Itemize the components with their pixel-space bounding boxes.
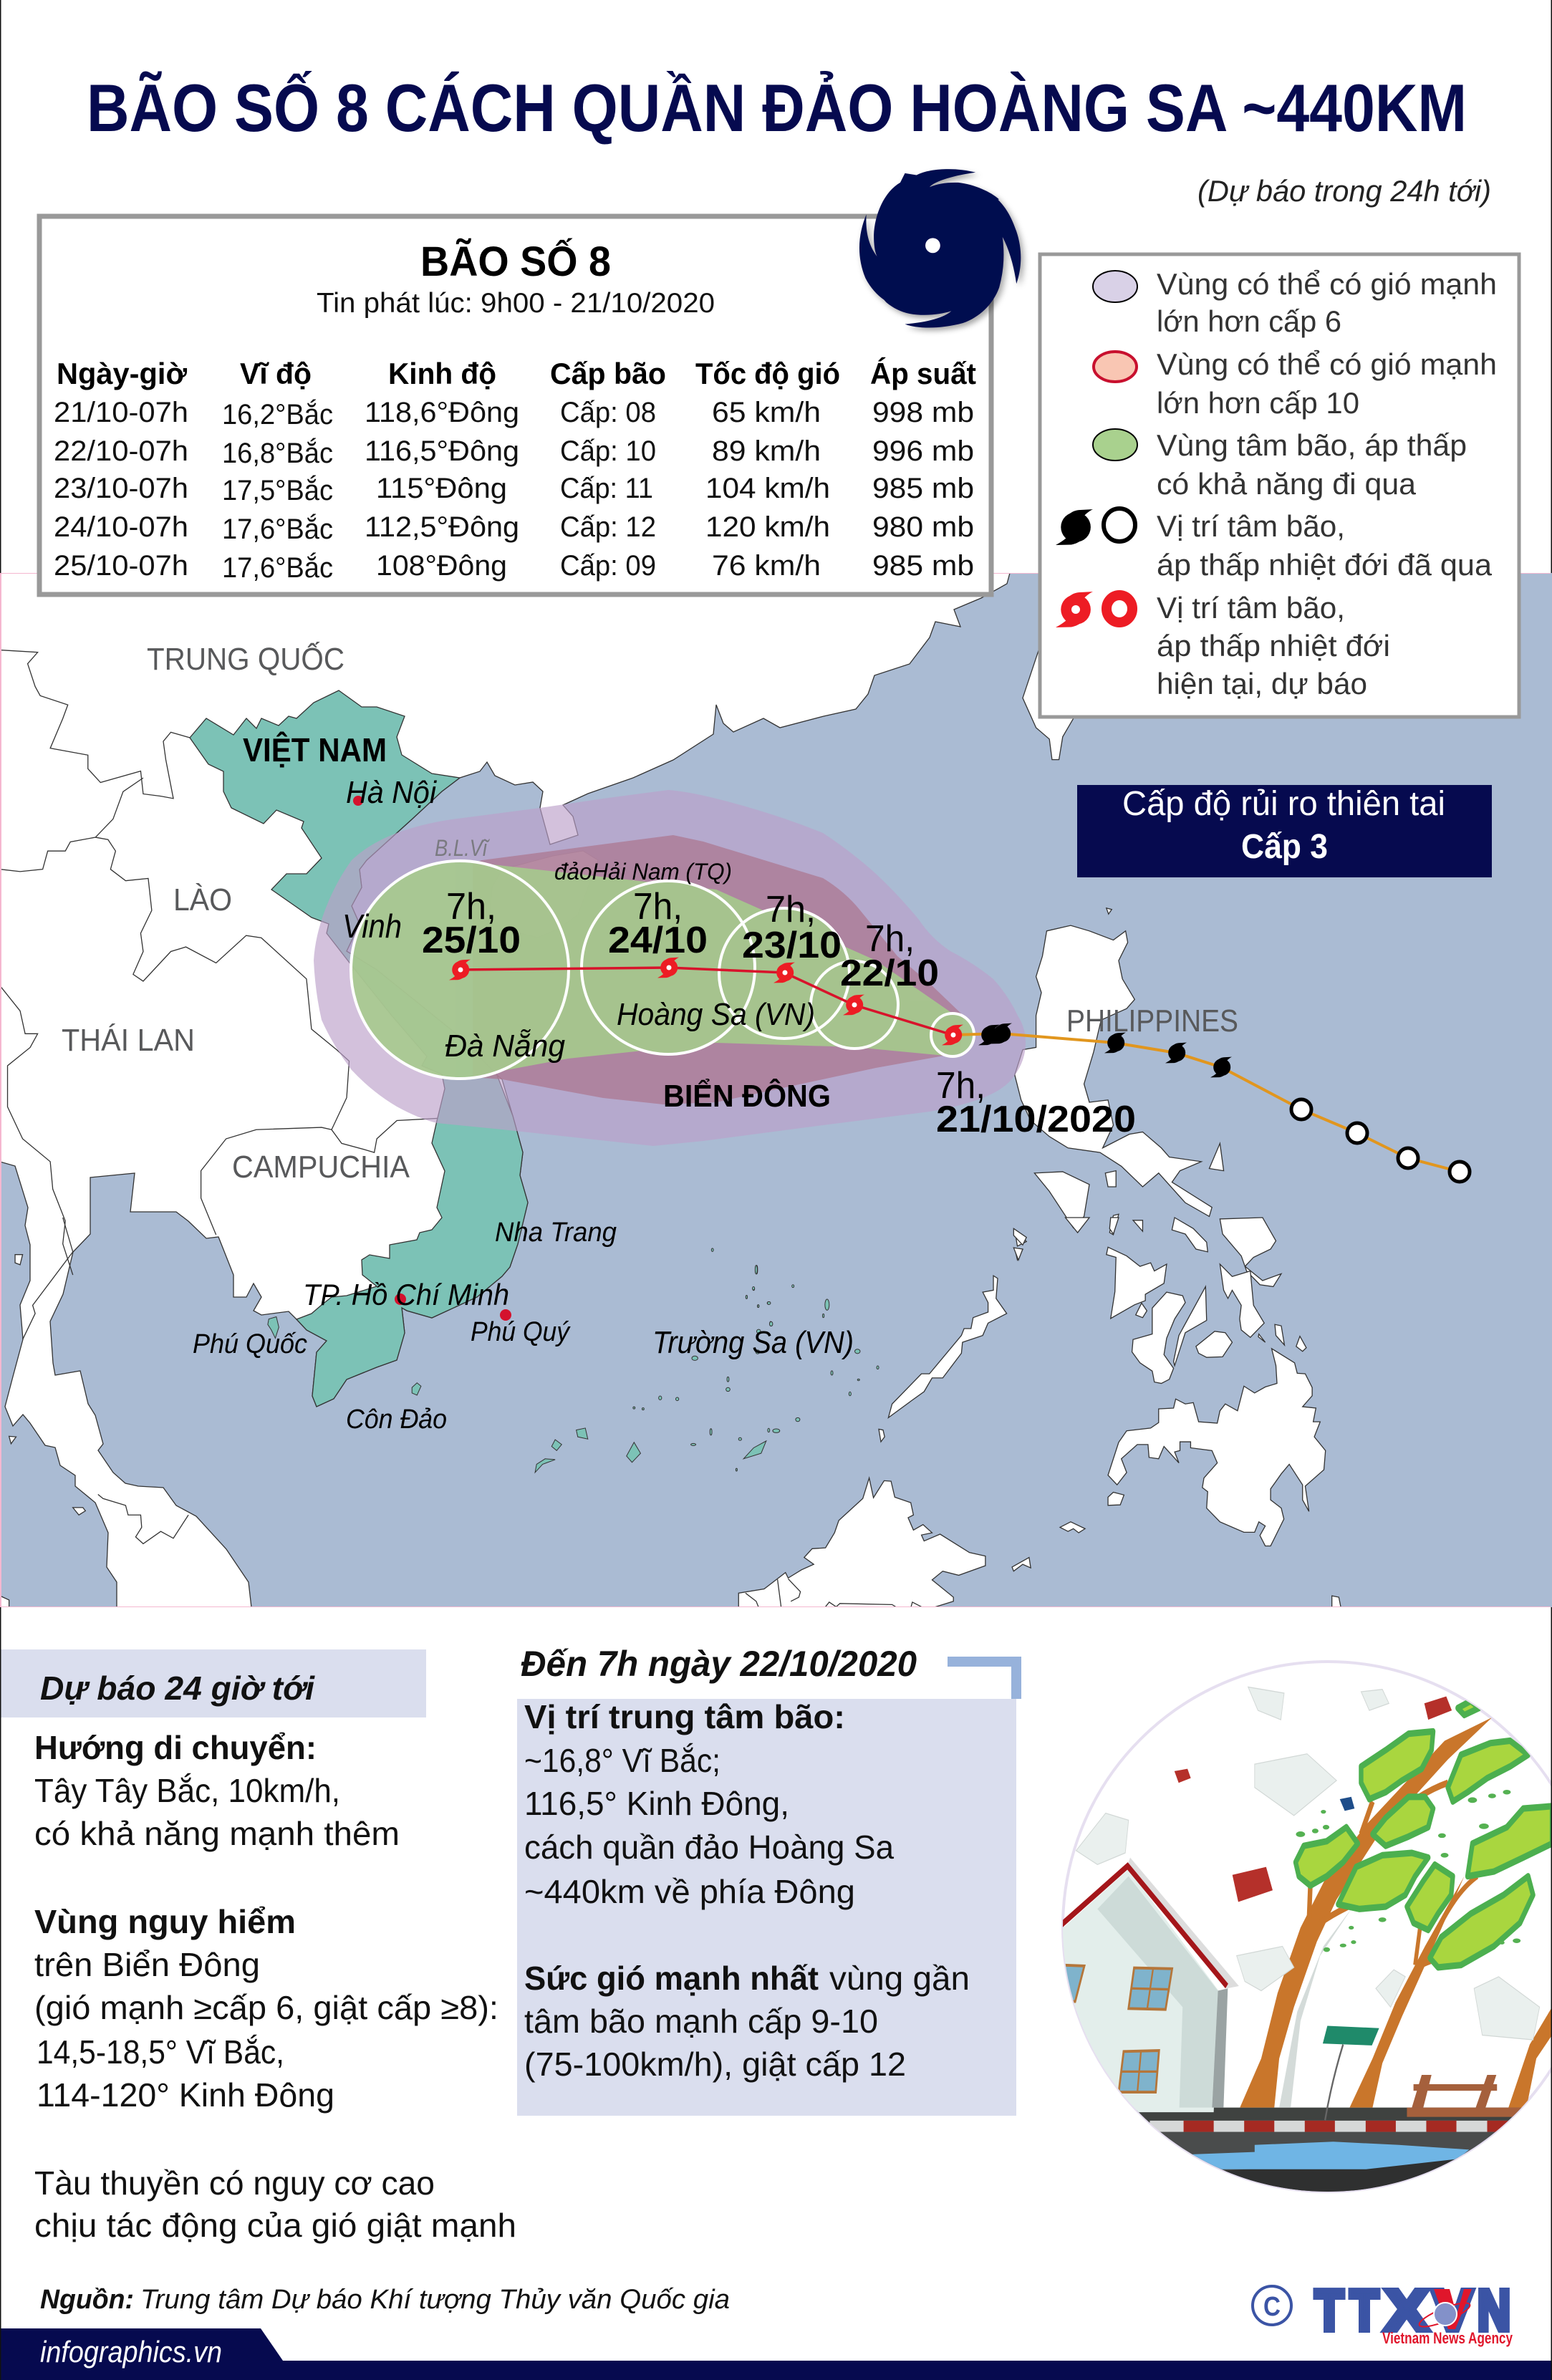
legend: past positions	[1056, 509, 1493, 582]
panel heading	[0, 1649, 426, 1717]
date labels on track: 21/10/2020	[936, 1099, 1136, 1140]
place labels: Phú Quý	[471, 1317, 571, 1347]
table row 21/10: Cấp: 08	[560, 397, 656, 428]
disaster risk level box: Cấp 3	[1241, 828, 1328, 866]
strongest wind text: (75-100km/h), giật cấp 12	[524, 2046, 906, 2083]
date labels on track: 7h,	[766, 889, 816, 930]
panel: forecast 24 hours	[0, 1649, 516, 2244]
legend: wind above level 10	[1094, 347, 1497, 420]
city dots	[353, 796, 511, 1321]
table heading: BÃO SỐ 8	[420, 239, 611, 285]
street sign	[1323, 2025, 1379, 2120]
table header row: Áp suất	[870, 357, 976, 390]
place labels: Hoàng Sa (VN)	[617, 997, 815, 1032]
place labels: đảoHải Nam (TQ)	[554, 859, 732, 885]
table row 25/10: 25/10-07h	[54, 550, 188, 582]
country labels: THÁI LAN	[62, 1023, 195, 1058]
place labels: Đà Nẵng	[445, 1028, 565, 1064]
country labels: LÀO	[173, 882, 232, 917]
table row 23/10	[54, 473, 974, 506]
danger zone text: 114-120° Kinh Đông	[37, 2076, 334, 2114]
table row 21/10: 998 mb	[872, 397, 974, 428]
national borders	[0, 650, 440, 1275]
road	[1137, 2107, 1521, 2192]
zone: wind above level 6	[314, 790, 1026, 1146]
legend: storm centre zone	[1093, 428, 1467, 501]
place labels: Trường Sa (VN)	[652, 1325, 854, 1360]
forecast track line	[460, 968, 953, 1035]
date labels on track: 7h,	[936, 1065, 985, 1107]
table header row: Tốc độ gió	[695, 357, 840, 390]
date labels on track: 22/10	[840, 953, 939, 994]
table row 24/10	[54, 511, 974, 545]
legend: wind above level 10: Vùng có thể có gió mạnh	[1157, 347, 1497, 381]
table row 22/10: 996 mb	[872, 435, 974, 467]
table row 23/10: 104 km/h	[705, 473, 830, 504]
place labels: Phú Quốc	[193, 1329, 307, 1359]
place labels	[193, 731, 854, 1435]
icon: large typhoon	[859, 169, 1021, 328]
zone: wind above level 10	[473, 835, 963, 1104]
storm centre position text: 116,5° Kinh Đông,	[524, 1785, 789, 1822]
table row 22/10	[54, 435, 974, 469]
flying papers	[1076, 1687, 1540, 2040]
wooden fence	[1407, 2075, 1525, 2117]
Philippines islands	[1015, 650, 1224, 1260]
illustration: storm scene	[1058, 1662, 1552, 2199]
panel heading: Dự báo 24 giờ tới	[40, 1670, 315, 1707]
movement direction text	[34, 1729, 400, 1852]
forecast circles	[351, 861, 974, 1079]
date labels on track	[422, 886, 1136, 1140]
legend: storm centre zone: có khả năng đi qua	[1157, 467, 1417, 501]
panel box	[517, 1699, 1016, 2116]
past track line	[953, 1034, 1460, 1172]
ship warning text: chịu tác động của gió giật mạnh	[34, 2207, 516, 2244]
table row 23/10: 115°Đông	[376, 473, 507, 504]
country labels: TRUNG QUỐC	[147, 640, 344, 677]
forecast positions: red storm icons	[449, 958, 963, 1045]
table header row: Cấp bão	[550, 357, 666, 390]
table row 25/10: 76 km/h	[712, 550, 821, 582]
storm centre position text: ~440km về phía Đông	[524, 1873, 855, 1910]
legend: wind above level 6: Vùng có thể có gió mạnh	[1157, 267, 1497, 301]
Vietnam	[190, 690, 528, 1407]
table row 23/10: 985 mb	[872, 473, 974, 504]
table row 23/10: 17,5°Bắc	[222, 474, 333, 506]
flying roof tiles	[1175, 1697, 1452, 1902]
table header row: Ngày-giờ	[57, 357, 187, 390]
storm centre position text: Vị trí trung tâm bão:	[524, 1698, 845, 1735]
past positions: low pressure rings	[1291, 1099, 1470, 1182]
movement direction text: Hướng di chuyển:	[34, 1729, 317, 1766]
legend: current and forecast positions: Vị trí tâm bão,	[1157, 591, 1345, 625]
logo: TTXVN: T	[1350, 2278, 1379, 2342]
table row 22/10: Cấp: 10	[560, 435, 656, 467]
danger zone text	[34, 1903, 498, 2114]
table row 22/10: 22/10-07h	[54, 435, 188, 467]
logo: TTXVN: N	[1478, 2278, 1510, 2342]
logo: TTXVN: V	[1432, 2278, 1473, 2342]
danger zone text: 14,5-18,5° Vĩ Bắc,	[37, 2033, 284, 2071]
storm centre position text	[524, 1698, 894, 1910]
panel: storm data table	[39, 216, 991, 594]
storm centre position text: ~16,8° Vĩ Bắc;	[524, 1742, 720, 1779]
strongest wind text: vùng gần	[829, 1960, 970, 1997]
strongest wind text	[524, 1960, 970, 2083]
table row 24/10: 24/10-07h	[54, 511, 188, 543]
legend: wind above level 6: lớn hơn cấp 6	[1157, 304, 1341, 338]
trees	[1240, 1701, 1552, 2108]
table row 21/10: 16,2°Bắc	[222, 398, 333, 430]
Hainan island	[490, 851, 598, 938]
legend: current and forecast positions: hiện tại, dự báo	[1157, 667, 1367, 700]
table row 21/10: 65 km/h	[712, 397, 821, 428]
place labels: TP. Hồ Chí Minh	[303, 1278, 509, 1311]
issue time: Tin phát lúc: 9h00 - 21/10/2020	[317, 288, 715, 319]
legend: wind above level 6	[1093, 267, 1497, 338]
table row 24/10: 112,5°Đông	[365, 511, 519, 543]
corner bracket	[948, 1657, 1021, 1699]
date labels on track: 7h,	[865, 918, 915, 960]
ship warning text: Tàu thuyền có nguy cơ cao	[34, 2164, 435, 2202]
past positions: black storm icons	[978, 1023, 1232, 1077]
table header row: Kinh độ	[388, 357, 496, 390]
table row 24/10: 17,6°Bắc	[222, 513, 333, 545]
table row 22/10: 89 km/h	[712, 435, 821, 467]
Vietnamese and small islands	[268, 1248, 780, 1473]
legend: past positions: Vị trí tâm bão,	[1157, 509, 1345, 543]
legend: past positions: áp thấp nhiệt đới đã qua	[1157, 548, 1493, 582]
table row 21/10	[54, 397, 974, 430]
source: Nguồn:	[40, 2285, 134, 2315]
table row 21/10: 21/10-07h	[54, 397, 188, 428]
danger zone text: (gió mạnh ≥cấp 6, giật cấp ≥8):	[34, 1989, 498, 2026]
legend: current and forecast positions: áp thấp nhiệt đới	[1157, 629, 1390, 663]
forecast note: (Dự báo trong 24h tới)	[1197, 174, 1491, 208]
map	[0, 572, 1552, 1608]
zone: storm centre path with circles	[351, 861, 974, 1079]
disaster risk level box	[1077, 785, 1492, 877]
date labels on track: 7h,	[633, 886, 683, 928]
table row 24/10: Cấp: 12	[560, 511, 656, 543]
logo: copyright mark	[1253, 2286, 1291, 2325]
date labels on track: 25/10	[422, 920, 521, 961]
country labels	[62, 640, 1238, 1185]
date labels on track: 24/10	[608, 920, 708, 961]
table row 25/10: 108°Đông	[376, 550, 507, 582]
table row 25/10	[54, 550, 974, 584]
table header row: Vĩ độ	[240, 357, 312, 390]
strongest wind text: Sức gió mạnh nhất	[524, 1960, 819, 1997]
footer bar: infographics.vn	[40, 2335, 222, 2369]
logo: TTXVN: X	[1385, 2278, 1428, 2342]
danger zone text: Vùng nguy hiểm	[34, 1903, 296, 1940]
panel heading: Đến 7h ngày 22/10/2020	[521, 1644, 917, 1684]
logo: TTXVN	[1315, 2278, 1513, 2347]
table row 25/10: 17,6°Bắc	[222, 551, 333, 584]
storm centre position text: cách quần đảo Hoàng Sa	[524, 1829, 894, 1866]
house	[1058, 1858, 1239, 2112]
movement direction text: có khả năng mạnh thêm	[34, 1815, 400, 1852]
table header row	[57, 357, 976, 390]
panel: by 7am 22/10/2020	[517, 1644, 1021, 2116]
danger zone text: trên Biển Đông	[34, 1946, 260, 1983]
source: Trung tâm Dự báo Khí tượng Thủy văn Quốc gia	[140, 2285, 730, 2315]
table row 24/10: 120 km/h	[705, 511, 830, 543]
map frame lines	[0, 572, 1552, 1608]
country labels: CAMPUCHIA	[232, 1150, 410, 1185]
legend: current and forecast positions	[1056, 591, 1390, 700]
panel: legend	[1040, 254, 1519, 717]
table row 23/10: 23/10-07h	[54, 473, 188, 504]
country labels: PHILIPPINES	[1066, 1003, 1238, 1039]
logo: copyright mark: C	[1263, 2292, 1281, 2322]
place labels: B.L.Vĩ	[435, 835, 490, 861]
table row 21/10: 118,6°Đông	[365, 397, 519, 428]
place labels: Côn Đảo	[346, 1405, 447, 1435]
storm danger zones	[314, 790, 1026, 1146]
logo: TTXVN: T	[1315, 2278, 1344, 2342]
legend: storm centre zone: Vùng tâm bão, áp thấp	[1157, 428, 1467, 462]
mainland Asia	[0, 573, 1010, 1607]
strongest wind text: tâm bão mạnh cấp 9-10	[524, 2003, 878, 2040]
table row 25/10: Cấp: 09	[560, 550, 656, 582]
disaster risk level box: Cấp độ rủi ro thiên tai	[1122, 785, 1445, 823]
place labels: Nha Trang	[495, 1218, 617, 1248]
table row 25/10: 985 mb	[872, 550, 974, 582]
date labels on track: 7h,	[446, 886, 496, 928]
place labels: Vinh	[342, 907, 402, 945]
table row 23/10: Cấp: 11	[560, 473, 653, 504]
logo: TTXVN: Vietnam News Agency	[1382, 2329, 1513, 2347]
place labels: Hà Nội	[346, 775, 437, 810]
table row 22/10: 116,5°Đông	[365, 435, 519, 467]
place labels: VIỆT NAM	[243, 731, 387, 769]
table row 24/10: 980 mb	[872, 511, 974, 543]
place labels: BIỂN ĐÔNG	[663, 1077, 831, 1114]
footer bar	[0, 2328, 1552, 2380]
ship warning text	[34, 2164, 516, 2244]
legend: wind above level 10: lớn hơn cấp 10	[1157, 386, 1359, 420]
date labels on track: 23/10	[742, 925, 842, 966]
table row 22/10: 16,8°Bắc	[222, 437, 333, 469]
movement direction text: Tây Tây Bắc, 10km/h,	[34, 1772, 340, 1809]
